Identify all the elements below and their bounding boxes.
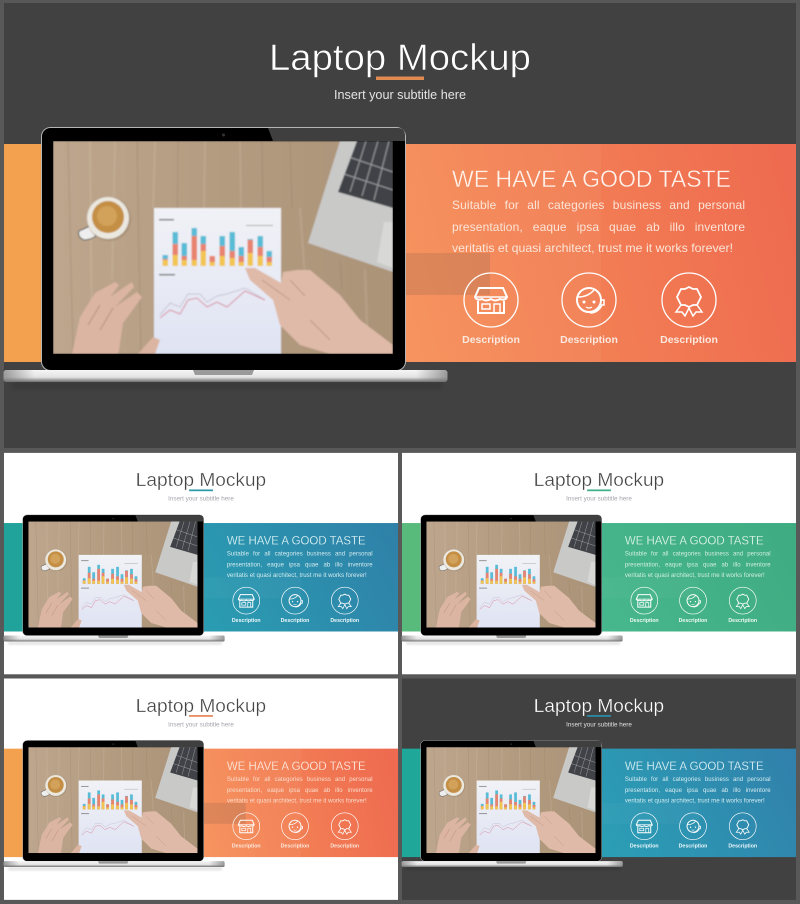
body text: veritatis et quasi architect, trust me it works forever! xyxy=(452,241,733,255)
laptop shadow xyxy=(12,383,442,388)
icon: award rosette xyxy=(662,273,716,327)
orange content band xyxy=(400,144,796,362)
subtitle: Insert your subtitle here xyxy=(168,496,234,503)
label: description 3: Description xyxy=(330,844,359,850)
line chart xyxy=(160,288,265,318)
label: description 2: Description xyxy=(281,618,309,624)
icon: support agent xyxy=(282,813,308,840)
title underline xyxy=(587,489,611,491)
title: Laptop Mockup xyxy=(136,695,266,716)
body text: presentation, eaque ipsa quae ab illo inventore xyxy=(625,788,771,794)
body text: Suitable for all categories business and personal xyxy=(625,551,771,557)
body text: Suitable for all categories business and personal xyxy=(227,551,373,557)
content band xyxy=(201,523,398,631)
left colour strip xyxy=(4,523,24,631)
title: Laptop Mockup xyxy=(534,695,664,716)
coffee cup xyxy=(79,197,131,241)
panel: large dark slide xyxy=(4,3,796,448)
label: description 2: Description xyxy=(560,334,618,346)
label: description 3: Description xyxy=(728,844,757,850)
laptop mockup xyxy=(402,515,623,644)
icon: support agent xyxy=(282,587,308,614)
laptop mockup xyxy=(4,515,225,644)
panel: white slide with orange band xyxy=(4,678,398,900)
label: description 2: Description xyxy=(281,844,309,850)
title underline xyxy=(189,489,213,491)
title underline xyxy=(587,715,611,717)
label: description 2: Description xyxy=(679,844,707,850)
content band xyxy=(201,749,398,857)
icon: support agent xyxy=(562,273,616,327)
laptop base xyxy=(4,370,448,382)
body text: veritatis et quasi architect, trust me it works forever! xyxy=(625,798,765,804)
panel: white slide with teal-blue band xyxy=(4,453,398,674)
label: description 3: Description xyxy=(728,618,757,624)
body text xyxy=(452,198,745,255)
body text: presentation, eaque ipsa quae ab illo inventore xyxy=(227,788,373,794)
panel: white slide with green band xyxy=(402,453,796,674)
report paper xyxy=(154,208,281,354)
icon: store xyxy=(233,813,260,840)
title underline xyxy=(376,76,424,80)
icon: award rosette xyxy=(729,813,756,840)
body text xyxy=(625,551,771,579)
left colour strip xyxy=(4,749,24,857)
icon: store xyxy=(631,813,658,840)
icon: store xyxy=(464,273,518,327)
webcam xyxy=(222,134,225,136)
body text xyxy=(227,551,373,579)
silver laptop on desk xyxy=(308,141,393,272)
label: description 2: Description xyxy=(679,618,707,624)
title: Laptop Mockup xyxy=(136,469,266,490)
icon: award rosette xyxy=(331,587,358,614)
laptop mockup xyxy=(402,740,623,870)
icon: support agent xyxy=(680,587,706,614)
right hand xyxy=(245,268,393,354)
left hand xyxy=(72,282,160,354)
photo: desk with report xyxy=(53,141,393,354)
body text: veritatis et quasi architect, trust me it works forever! xyxy=(227,798,367,804)
icon: award rosette xyxy=(331,813,358,840)
body text: presentation, eaque ipsa quae ab illo inventore xyxy=(227,562,373,568)
title underline xyxy=(189,715,213,717)
label: description 1: Description xyxy=(630,844,659,850)
label: description 3: Description xyxy=(330,618,359,624)
label: description 1: Description xyxy=(630,618,659,624)
laptop mockup xyxy=(4,740,225,870)
title: Laptop Mockup xyxy=(269,37,531,78)
subtitle: Insert your subtitle here xyxy=(168,721,234,728)
icon: store xyxy=(233,587,260,614)
subtitle: Insert your subtitle here xyxy=(334,87,466,102)
left colour strip xyxy=(402,523,422,631)
label: description 3: Description xyxy=(660,334,718,346)
body text: Suitable for all categories business and personal xyxy=(227,777,373,783)
laptop mockup xyxy=(4,128,448,388)
icon: support agent xyxy=(680,813,706,840)
heading: WE HAVE A GOOD TASTE xyxy=(227,533,366,547)
heading: WE HAVE A GOOD TASTE xyxy=(452,166,731,193)
subtitle: Insert your subtitle here xyxy=(566,496,632,503)
left colour strip xyxy=(402,749,422,857)
title: Laptop Mockup xyxy=(534,469,664,490)
label: description 1: Description xyxy=(462,334,520,346)
heading: WE HAVE A GOOD TASTE xyxy=(625,759,764,773)
body text: presentation, eaque ipsa quae ab illo inventore xyxy=(625,562,771,568)
label: description 1: Description xyxy=(232,844,261,850)
content band xyxy=(599,749,796,857)
label: description 1: Description xyxy=(232,618,261,624)
screen reflection xyxy=(268,128,405,141)
panel: dark slide with blue band xyxy=(402,678,796,900)
heading: WE HAVE A GOOD TASTE xyxy=(227,759,366,773)
subtitle: Insert your subtitle here xyxy=(566,721,632,728)
stacked bar chart xyxy=(162,228,272,266)
body text: veritatis et quasi architect, trust me it works forever! xyxy=(625,573,765,579)
body text: veritatis et quasi architect, trust me it works forever! xyxy=(227,573,367,579)
icon: award rosette xyxy=(729,587,756,614)
body text xyxy=(625,777,771,804)
body text xyxy=(227,777,373,804)
left colour strip xyxy=(4,144,44,362)
body text: Suitable for all categories business and personal xyxy=(625,777,771,783)
laptop frame xyxy=(42,128,406,370)
body text: Suitable for all categories business and personal xyxy=(452,198,745,212)
content band xyxy=(599,523,796,631)
body text: presentation, eaque ipsa quae ab illo inventore xyxy=(452,220,745,234)
icon: store xyxy=(631,587,658,614)
heading: WE HAVE A GOOD TASTE xyxy=(625,533,764,547)
